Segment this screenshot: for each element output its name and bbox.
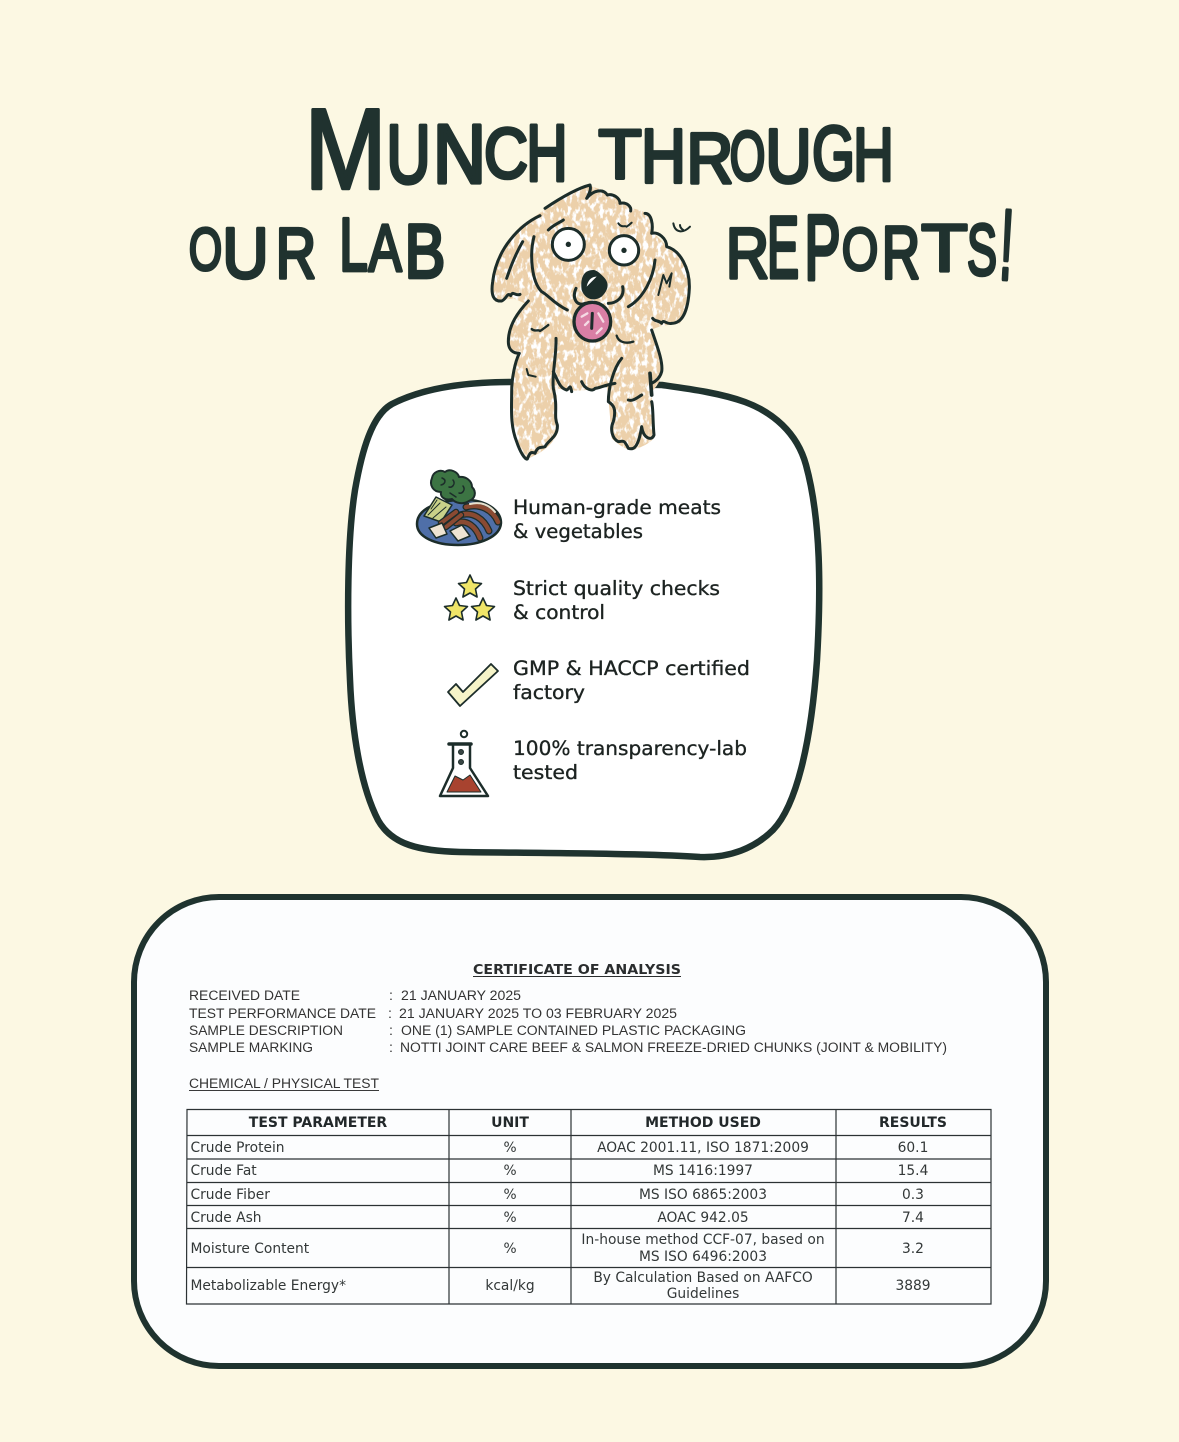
text: GMP and HACCP: GMP & HACCP certified: [513, 657, 750, 680]
parameter column: Crude Protein: [190, 1140, 285, 1156]
text: human-grade meats: Human-grade meats: [513, 496, 721, 519]
sample details: [189, 988, 947, 1056]
table header: TEST PARAMETER: [249, 1115, 387, 1131]
method column: AOAC 2001.11, ISO 1871:2009: [597, 1140, 809, 1156]
sample details: RECEIVED DATE: [189, 988, 300, 1004]
section heading: chemical physical test: CHEMICAL / PHYSICAL TEST: [189, 1076, 379, 1092]
results column: [895, 1140, 931, 1294]
method column: MS 1416:1997: [653, 1163, 753, 1179]
title: Munch through: M: [305, 85, 386, 213]
title: Munch through: C: [484, 115, 528, 194]
text: human-grade meats: & vegetables: [513, 520, 643, 543]
icon: plate of meat and vegetables: [417, 470, 501, 545]
unit column: %: [503, 1187, 517, 1203]
sample details: ONE (1) SAMPLE CONTAINED PLASTIC PACKAGING: [401, 1023, 746, 1039]
sample details: TEST PERFORMANCE DATE: [189, 1006, 376, 1022]
text: GMP and HACCP: factory: [513, 681, 585, 704]
icon: lab flask: [440, 731, 488, 796]
sample details: SAMPLE DESCRIPTION: [189, 1023, 343, 1039]
title: our lab: A: [368, 210, 402, 286]
parameter column: Crude Fat: [190, 1163, 257, 1179]
title: Munch through: R: [687, 119, 733, 199]
method column: [581, 1140, 825, 1302]
parameter column: Metabolizable Energy*: [190, 1278, 346, 1294]
parameter column: Crude Fiber: [190, 1187, 270, 1203]
method column: By Calculation Based on AAFCO: [593, 1270, 813, 1286]
title: reports!: T: [921, 211, 968, 286]
text: strict quality checks: & control: [513, 601, 605, 624]
text: transparency: tested: [513, 761, 578, 784]
method column: AOAC 942.05: [657, 1210, 749, 1226]
sample details: :: [389, 1040, 393, 1056]
text: transparency: [513, 737, 747, 784]
results column: 7.4: [902, 1210, 924, 1226]
sample details: :: [389, 1023, 393, 1039]
parameter column: Moisture Content: [190, 1241, 310, 1257]
text: strict quality checks: [513, 577, 720, 624]
title: our lab: L: [339, 203, 368, 287]
unit column: [485, 1140, 535, 1294]
method column: Guidelines: [667, 1286, 739, 1302]
title: reports!: P: [804, 196, 841, 299]
title: Munch through: [305, 85, 894, 213]
illustration: dog: [492, 185, 690, 460]
sample details: 21 JANUARY 2025: [401, 988, 521, 1004]
results column: 3889: [895, 1278, 931, 1294]
method column: In-house method CCF-07, based on: [581, 1232, 825, 1248]
title: Munch through: U: [765, 113, 812, 199]
title: reports!: R: [882, 211, 920, 294]
sample details: 21 JANUARY 2025 TO 03 FEBRUARY 2025: [399, 1006, 677, 1022]
title: reports!: O: [842, 217, 878, 284]
title: Munch through: O: [730, 116, 765, 195]
icon: check mark: [448, 664, 498, 706]
sample details: NOTTI JOINT CARE BEEF & SALMON FREEZE-DRIED CHUNKS (JOINT & MOBILITY): [400, 1040, 947, 1056]
icon: three stars: [444, 575, 494, 620]
table header: RESULTS: [879, 1115, 947, 1131]
title: our lab: O: [189, 217, 222, 284]
unit column: %: [503, 1163, 517, 1179]
title: Munch through: G: [812, 112, 855, 197]
title: Munch through: T: [598, 114, 642, 193]
results column: 0.3: [902, 1187, 924, 1203]
method column: MS ISO 6865:2003: [639, 1187, 767, 1203]
sample details: :: [389, 988, 393, 1004]
results column: 60.1: [898, 1140, 928, 1156]
table: test results: [186, 1110, 991, 1304]
text: transparency: 100% transparency-lab: [513, 737, 747, 760]
title: reports!: E: [767, 198, 799, 296]
title: our lab: [189, 203, 445, 294]
title: Munch through: N: [433, 107, 486, 201]
table header: METHOD USED: [645, 1115, 761, 1131]
text: human-grade meats: [513, 496, 721, 543]
title: Munch through: H: [853, 114, 894, 198]
unit column: %: [503, 1140, 517, 1156]
sample details: SAMPLE MARKING: [189, 1040, 313, 1056]
title: Munch through: U: [386, 108, 431, 201]
text: GMP and HACCP: [513, 657, 750, 704]
table header: [249, 1115, 947, 1131]
unit column: %: [503, 1210, 517, 1226]
title: reports!: S: [967, 210, 997, 290]
table header: UNIT: [491, 1115, 529, 1131]
results column: 15.4: [898, 1163, 928, 1179]
certificate outline: [134, 897, 1046, 1366]
title: our lab: U: [222, 215, 269, 294]
panel outline: [348, 382, 819, 857]
title: reports!: !: [998, 190, 1016, 301]
parameter column: Crude Ash: [190, 1210, 262, 1226]
parameter column: [190, 1140, 346, 1294]
panel: certificate of analysis: [134, 897, 1046, 1366]
title: reports!: R: [726, 213, 769, 293]
unit column: %: [503, 1241, 517, 1257]
title: reports!: [726, 190, 1016, 301]
panel: benefits: [348, 382, 819, 857]
method column: MS ISO 6496:2003: [639, 1249, 767, 1265]
text: strict quality checks: Strict quality checks: [513, 577, 720, 600]
title: our lab: R: [276, 213, 316, 293]
title: Munch through: H: [526, 108, 568, 198]
unit column: kcal/kg: [485, 1278, 535, 1294]
title: Munch through: H: [641, 114, 686, 199]
results column: 3.2: [902, 1241, 924, 1257]
title: our lab: B: [405, 209, 445, 294]
certificate heading: CERTIFICATE OF ANALYSIS: [473, 963, 681, 978]
sample details: :: [388, 1006, 392, 1022]
